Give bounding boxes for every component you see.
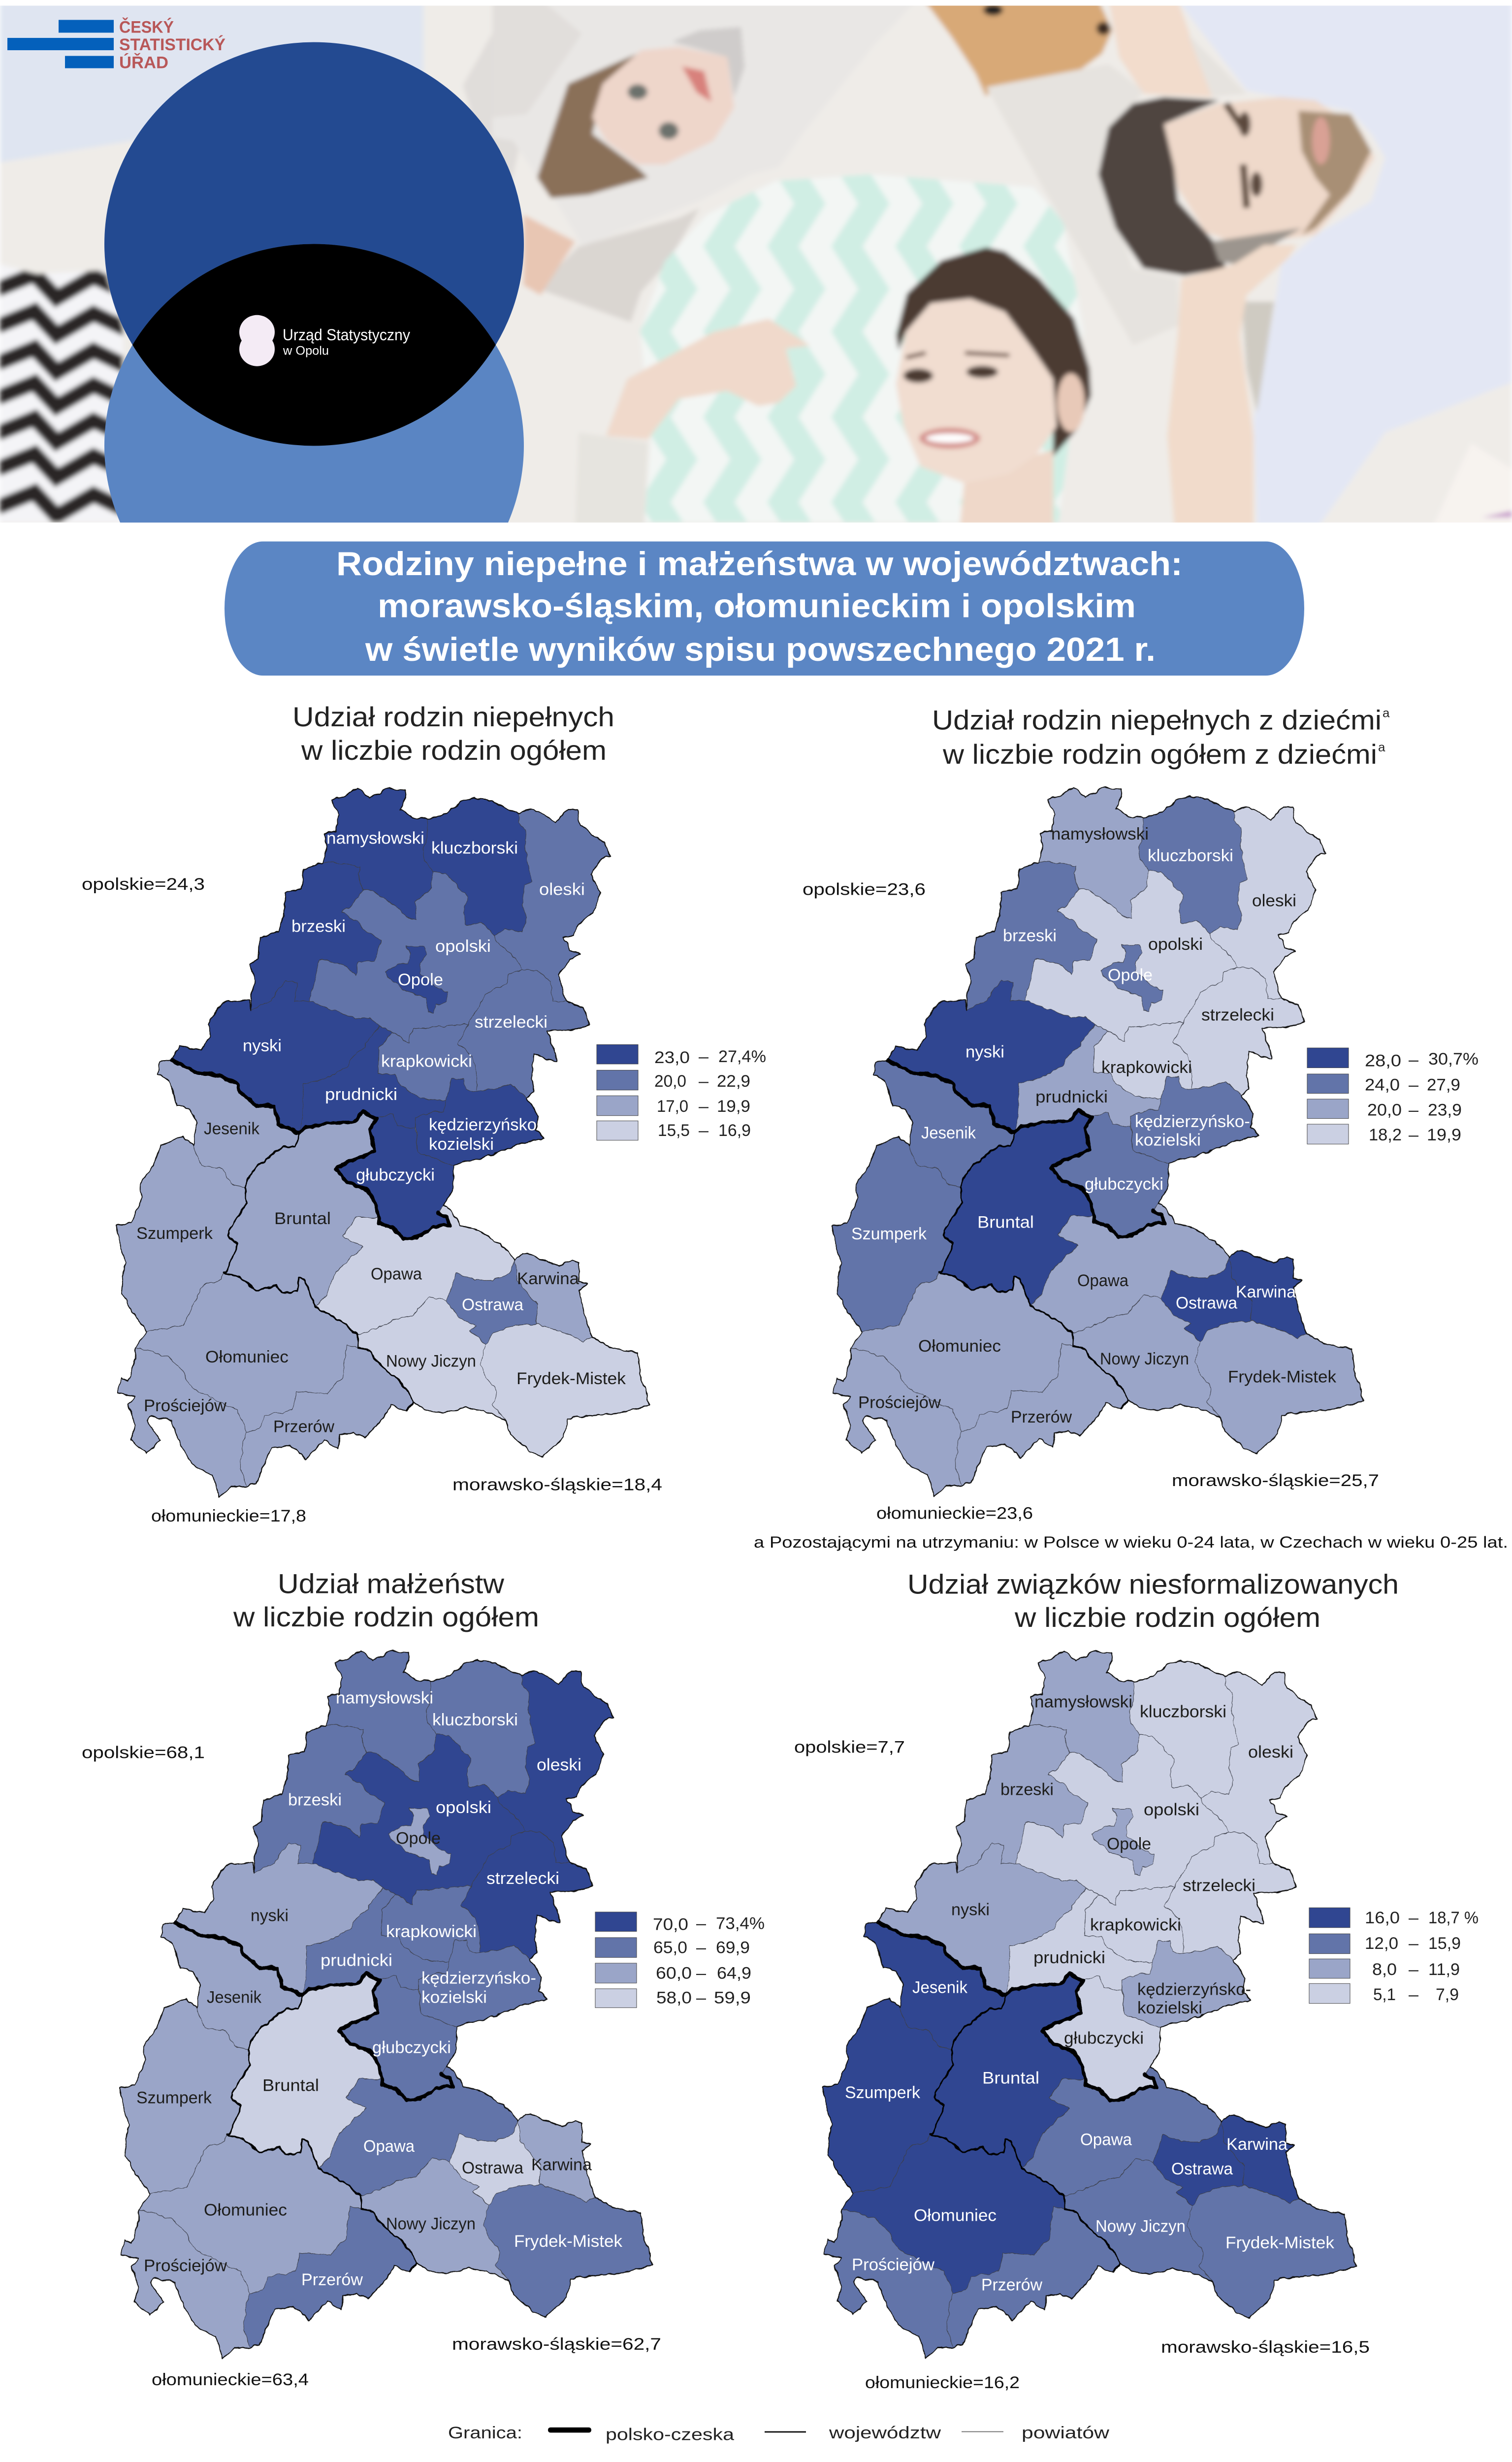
legend: –	[696, 1964, 706, 1983]
legend: 70,0	[653, 1915, 688, 1934]
choropleth map	[832, 784, 1365, 1497]
county labels: opolski	[1148, 935, 1203, 954]
county labels: oleski	[1248, 1743, 1293, 1761]
county labels: Nowy Jiczyn	[1095, 2217, 1186, 2235]
county labels: krapkowicki	[1101, 1058, 1192, 1077]
legend: 15,9	[1428, 1934, 1461, 1953]
county labels: kędzierzyńsko	[429, 1115, 537, 1134]
logo: Český statistický úřad: ÚŘAD	[119, 53, 168, 72]
county labels: Prościejów	[852, 2255, 934, 2274]
hero photo: family lying on a bed	[0, 6, 1512, 523]
logo: Urząd Statystyczny w Opolu: Urząd Statystyczny	[283, 326, 410, 344]
county labels: Szumperk	[851, 1224, 927, 1243]
legend: 30,7%	[1428, 1049, 1479, 1069]
photo scene	[0, 0, 1512, 545]
legend: 58,0	[656, 1988, 692, 2008]
heading: w liczbie rodzin ogółem	[301, 735, 607, 766]
heading: a	[1378, 741, 1385, 754]
panel: udział związków niesformalizowanych	[794, 1569, 1479, 2392]
legend	[1309, 1908, 1479, 2004]
logo: Urząd Statystyczny w Opolu: w Opolu	[283, 344, 329, 357]
county labels: kędzierzyńsko-	[421, 1969, 536, 1987]
county labels: opolski	[436, 1798, 491, 1817]
legend: –	[699, 1097, 708, 1116]
legend: –	[696, 1938, 706, 1957]
county labels: Opawa	[363, 2137, 415, 2156]
main title banner: Rodziny niepełne i małżeństwa w województwach:	[336, 545, 1183, 583]
heading	[932, 705, 1390, 770]
regional values: morawsko-śląskie=18,4	[452, 1475, 662, 1494]
regional values: opolskie=7,7	[794, 1738, 905, 1757]
county labels: namysłowski	[336, 1688, 433, 1708]
county labels: Ostrawa	[1176, 1294, 1237, 1312]
legend: –	[696, 1988, 706, 2008]
legend: –	[1409, 1101, 1418, 1120]
county labels: Ołomuniec	[914, 2206, 997, 2225]
regional values: ołomunieckie=23,6	[876, 1504, 1033, 1523]
circle: upper dark blue	[104, 42, 524, 345]
legend: –	[1409, 1985, 1418, 2004]
county labels: głubczycki	[356, 1166, 435, 1184]
county labels: Ostrawa	[462, 2159, 523, 2177]
county labels: strzelecki	[1183, 1876, 1255, 1895]
legend	[597, 1044, 766, 1140]
county labels: prudnicki	[321, 1951, 392, 1970]
county labels: Nowy Jiczyn	[1100, 1349, 1189, 1368]
legend: 19,9	[1427, 1125, 1461, 1144]
choropleth map	[120, 1649, 653, 2359]
main title banner: morawsko-śląskim, ołomunieckim i opolskim	[378, 587, 1136, 624]
legend: 27,9	[1427, 1075, 1460, 1095]
county labels: kluczborski	[432, 1711, 518, 1729]
county labels: opolski	[435, 937, 491, 956]
legend: 59,9	[714, 1988, 751, 2008]
county labels: Prościejów	[858, 1393, 941, 1412]
regional values	[803, 880, 1379, 1523]
legend: 20,0	[1367, 1101, 1402, 1120]
county labels	[851, 824, 1336, 1426]
panel: udział małżeństw	[82, 1569, 765, 2389]
county labels: nyski	[965, 1042, 1004, 1061]
county labels: Opawa	[1080, 2130, 1132, 2149]
county labels: Przerów	[273, 1417, 334, 1436]
legend: 69,9	[716, 1938, 750, 1957]
heading: Udział związków niesformalizowanych	[907, 1569, 1399, 1600]
heading: a	[1383, 707, 1390, 720]
county labels: Ołomuniec	[918, 1336, 1001, 1356]
county labels: strzelecki	[475, 1012, 547, 1032]
heading: Udział rodzin niepełnych z dziećmi	[932, 705, 1382, 736]
county labels: Przerów	[1011, 1408, 1072, 1426]
county labels: prudnicki	[1035, 1087, 1108, 1106]
county labels: Opole	[398, 971, 443, 989]
heading	[292, 702, 614, 766]
heading	[233, 1569, 539, 1633]
legend: –	[1409, 1960, 1418, 1979]
regional values	[794, 1738, 1370, 2392]
legend: –	[1409, 1909, 1418, 1927]
border legend: polsko-czeska	[606, 2425, 734, 2444]
heading: w liczbie rodzin ogółem	[233, 1602, 539, 1633]
county labels: nyski	[243, 1036, 282, 1055]
logo: Český statistický úřad	[7, 17, 225, 72]
legend: 8,0	[1372, 1960, 1397, 1979]
county labels: kluczborski	[431, 839, 518, 858]
regional values: morawsko-śląskie=16,5	[1161, 2337, 1370, 2357]
legend: –	[699, 1047, 708, 1066]
county labels: Bruntal	[262, 2076, 319, 2095]
county labels: Opawa	[371, 1264, 422, 1283]
county labels: krapkowicki	[386, 1922, 477, 1941]
heading: w liczbie rodzin ogółem	[1014, 1602, 1320, 1633]
county labels: Ostrawa	[462, 1296, 523, 1314]
county labels: brzeski	[288, 1790, 342, 1809]
legend: 11,9	[1428, 1960, 1460, 1979]
county labels: Ołomuniec	[205, 1348, 289, 1366]
regional values: opolskie=24,3	[82, 875, 205, 894]
county labels: Opole	[396, 1829, 441, 1847]
legend: 22,9	[717, 1072, 750, 1091]
county labels: Opole	[1108, 966, 1153, 984]
regional values	[82, 1743, 661, 2389]
legend: –	[1409, 1125, 1418, 1144]
county labels: strzelecki	[1201, 1005, 1274, 1024]
county labels: kozielski	[421, 1988, 487, 2007]
county labels: strzelecki	[486, 1869, 559, 1888]
county labels: Frydek-Mistek	[1228, 1367, 1336, 1386]
border legend	[448, 2424, 1110, 2444]
county labels: Jesenik	[921, 1124, 976, 1142]
county labels: brzeski	[1000, 1780, 1054, 1799]
county labels: głubczycki	[1064, 2029, 1144, 2047]
panel: udział rodzin niepełnych	[82, 702, 766, 1525]
county labels: namysłowski	[1051, 824, 1149, 843]
county labels: Karwina	[1226, 2135, 1287, 2154]
legend: 65,0	[653, 1938, 687, 1957]
legend: 16,0	[1365, 1909, 1400, 1927]
heading: Udział rodzin niepełnych	[292, 702, 614, 733]
county labels: Nowy Jiczyn	[386, 2214, 476, 2233]
county labels: kędzierzyńsko-	[1135, 1112, 1250, 1131]
legend	[1307, 1048, 1479, 1144]
county labels: brzeski	[1003, 926, 1057, 945]
regional values: opolskie=23,6	[803, 880, 926, 899]
county labels: Szumperk	[136, 2088, 212, 2107]
county labels: nyski	[951, 1900, 990, 1919]
main title banner: w świetle wyników spisu powszechnego 2021 r.	[365, 631, 1156, 668]
main title banner	[225, 542, 1304, 676]
legend: –	[699, 1121, 708, 1140]
legend: 73,4%	[716, 1914, 765, 1933]
regional values: morawsko-śląskie=25,7	[1172, 1471, 1379, 1490]
county labels: kluczborski	[1140, 1702, 1226, 1721]
legend: 12,0	[1365, 1934, 1398, 1953]
county labels: Ostrawa	[1171, 2160, 1233, 2178]
legend	[595, 1912, 765, 2008]
county labels: prudnicki	[1033, 1948, 1105, 1967]
county labels: Jesenik	[204, 1119, 259, 1138]
county labels: namysłowski	[326, 829, 424, 847]
county labels: krapkowicki	[1090, 1915, 1181, 1934]
circle: lower light blue	[104, 244, 524, 523]
heading: w liczbie rodzin ogółem z dziećmi	[942, 739, 1377, 770]
county labels: brzeski	[291, 917, 346, 936]
legend: –	[1409, 1050, 1418, 1069]
county labels: krapkowicki	[381, 1052, 472, 1070]
county labels: namysłowski	[1034, 1692, 1132, 1711]
county labels: Opawa	[1077, 1271, 1128, 1290]
county labels: Jesenik	[912, 1978, 967, 1997]
legend: 24,0	[1365, 1075, 1400, 1095]
legend: 15,5	[658, 1121, 690, 1140]
choropleth map	[822, 1651, 1357, 2358]
legend: –	[696, 1914, 706, 1933]
county labels: kędzierzyńsko-	[1137, 1980, 1251, 1999]
logo: Český statistický úřad: ČESKÝ	[119, 17, 174, 36]
legend: 18,2	[1369, 1125, 1402, 1144]
county labels	[845, 1692, 1334, 2295]
county labels: Frydek-Mistek	[1225, 2234, 1334, 2252]
legend: 16,9	[718, 1121, 751, 1140]
county labels: Karwina	[531, 2155, 592, 2174]
legend: 17,0	[657, 1097, 688, 1116]
county labels: Jesenik	[207, 1988, 261, 2007]
legend: 23,0	[654, 1048, 690, 1067]
border legend: powiatów	[1022, 2424, 1110, 2442]
county labels: Opole	[1107, 1835, 1151, 1853]
border legend: województw	[829, 2424, 941, 2442]
heading	[907, 1569, 1399, 1633]
county labels: oleski	[1252, 891, 1296, 910]
legend: 27,4%	[718, 1047, 766, 1066]
county labels: oleski	[537, 1755, 581, 1774]
circle overlap: black lens	[104, 244, 524, 648]
logo: Český statistický úřad: STATISTICKÝ	[119, 35, 225, 54]
county labels: Karwina	[517, 1269, 579, 1288]
legend: –	[699, 1072, 708, 1091]
regional values: ołomunieckie=16,2	[865, 2373, 1020, 2392]
county labels	[136, 1688, 622, 2289]
county labels: Nowy Jiczyn	[386, 1352, 476, 1370]
legend: 5,1	[1373, 1985, 1396, 2004]
county labels: Prościejów	[144, 1396, 226, 1415]
county labels: nyski	[251, 1906, 289, 1925]
county labels: kozielski	[429, 1135, 494, 1154]
county labels: Szumperk	[845, 2083, 920, 2102]
choropleth map	[116, 787, 650, 1497]
logo: Urząd Statystyczny w Opolu	[239, 315, 410, 366]
legend: 7,9	[1436, 1985, 1459, 2004]
county labels: kozielski	[1137, 1999, 1202, 2017]
legend: 64,9	[717, 1964, 751, 1983]
legend: 23,9	[1428, 1101, 1462, 1120]
footnote: a Pozostającymi na utrzymaniu: w Polsce w wieku 0-24 lata, w Czechach w wieku 0-25 lat.	[754, 1534, 1508, 1552]
county labels: Bruntal	[274, 1209, 331, 1228]
county labels: kozielski	[1135, 1131, 1201, 1149]
panel: udział rodzin niepełnych z dziećmi	[803, 705, 1479, 1523]
county labels: Przerów	[301, 2270, 363, 2289]
county labels: głubczycki	[372, 2038, 451, 2057]
border legend: Granica:	[448, 2424, 522, 2442]
county labels: Przerów	[981, 2275, 1042, 2295]
regional values: ołomunieckie=17,8	[151, 1507, 306, 1525]
county labels: prudnicki	[325, 1085, 397, 1104]
legend: 20,0	[654, 1072, 686, 1091]
county labels: oleski	[539, 880, 585, 899]
legend: 19,9	[717, 1097, 750, 1116]
county labels: Frydek-Mistek	[516, 1369, 626, 1388]
heading: Udział małżeństw	[278, 1569, 505, 1599]
legend: –	[1409, 1075, 1418, 1095]
regional values: morawsko-śląskie=62,7	[452, 2335, 661, 2354]
county labels: Szumperk	[136, 1224, 213, 1243]
county labels: opolski	[1144, 1800, 1199, 1819]
county labels	[136, 829, 626, 1436]
regional values	[82, 875, 662, 1525]
legend: 18,7 %	[1428, 1909, 1479, 1927]
county labels: Karwina	[1236, 1283, 1296, 1301]
county labels: Bruntal	[977, 1213, 1034, 1232]
legend: 28,0	[1365, 1051, 1401, 1070]
county labels: kluczborski	[1148, 846, 1233, 865]
county labels: Ołomuniec	[204, 2201, 287, 2220]
county labels: Bruntal	[982, 2069, 1039, 2087]
legend: 60,0	[656, 1964, 692, 1983]
regional values: ołomunieckie=63,4	[152, 2370, 309, 2389]
regional values: opolskie=68,1	[82, 1743, 205, 1762]
county labels: Frydek-Mistek	[514, 2232, 622, 2251]
county labels: głubczycki	[1085, 1174, 1163, 1194]
county labels: Prościejów	[144, 2256, 227, 2275]
legend: –	[1409, 1934, 1418, 1953]
